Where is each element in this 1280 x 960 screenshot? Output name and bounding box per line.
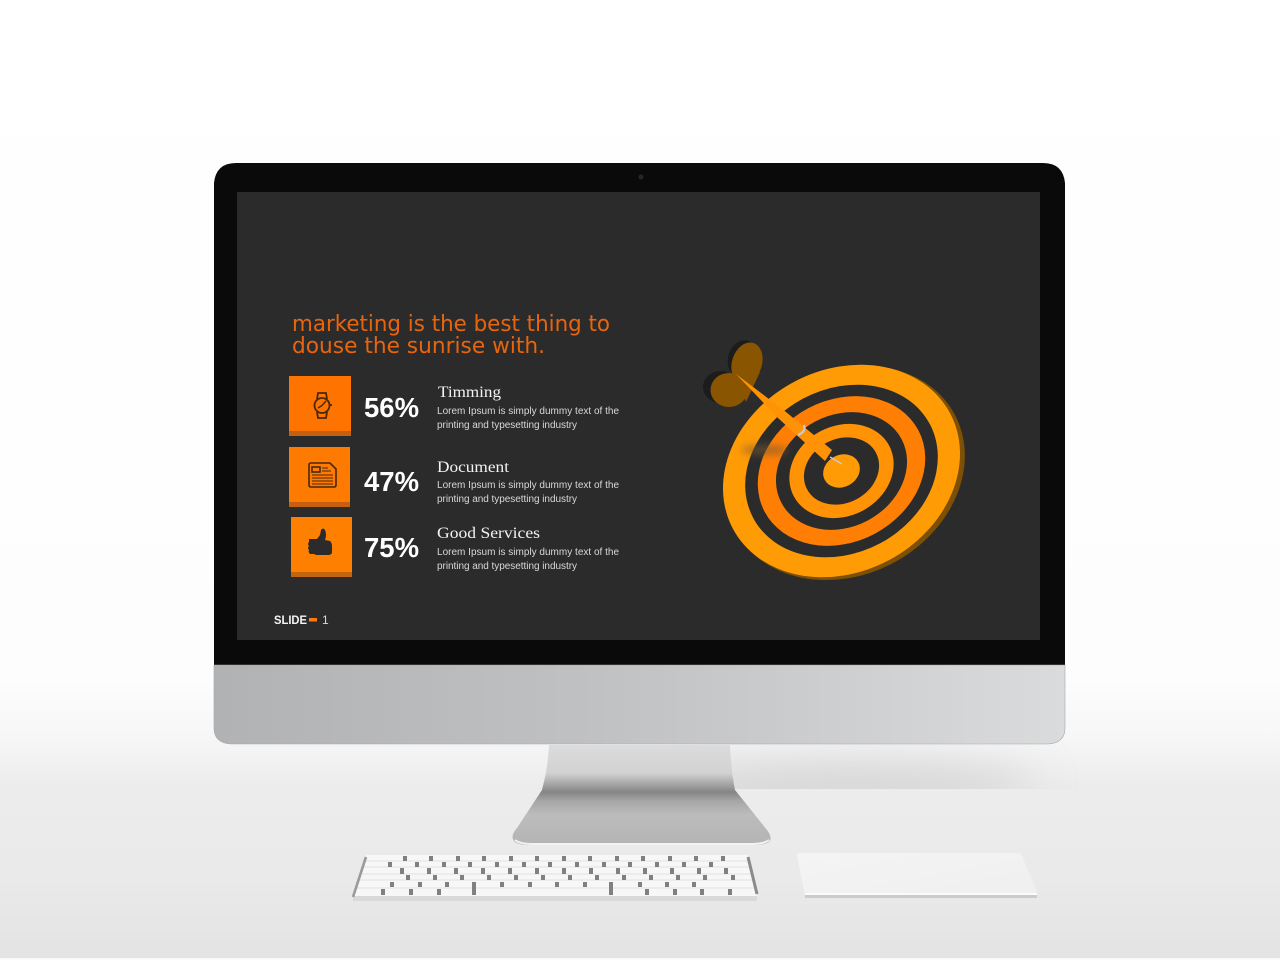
description: printing and typesetting industry xyxy=(437,494,577,505)
heading Timming: Timming xyxy=(438,384,501,401)
dart needle xyxy=(830,457,842,464)
icon tile: watch xyxy=(289,376,351,436)
row: Good Services xyxy=(291,517,619,577)
monitor xyxy=(214,163,1065,665)
monitor stand xyxy=(513,745,771,845)
dart flights xyxy=(710,338,768,407)
webcam xyxy=(638,174,644,180)
description: Lorem Ipsum is simply dummy text of the xyxy=(437,480,619,491)
description xyxy=(437,406,619,431)
heading Good Services: Good Services xyxy=(437,525,540,542)
heading Document: Document xyxy=(437,459,510,476)
keyboard xyxy=(353,855,757,901)
description xyxy=(437,547,619,572)
dart shadow on board xyxy=(741,445,789,455)
title xyxy=(292,312,610,359)
dart shaft and barrel xyxy=(736,374,832,461)
target graphic xyxy=(685,322,1003,622)
description xyxy=(437,480,619,505)
row: Document xyxy=(289,447,619,507)
description: printing and typesetting industry xyxy=(437,561,577,572)
slide number xyxy=(274,613,329,627)
monitor chin xyxy=(214,665,1065,744)
description: Lorem Ipsum is simply dummy text of the xyxy=(437,547,619,558)
slide number: SLIDE xyxy=(274,613,307,627)
slide screen xyxy=(237,192,1040,640)
row: Timming xyxy=(289,376,619,436)
description: printing and typesetting industry xyxy=(437,420,577,431)
icon tile: thumbs up xyxy=(291,517,352,577)
dart ring xyxy=(798,425,804,435)
title: marketing is the best thing to xyxy=(292,312,610,337)
trackpad xyxy=(797,853,1037,898)
slide number: 1 xyxy=(322,613,329,627)
title: douse the sunrise with. xyxy=(292,334,545,359)
percentage 75%: 75% xyxy=(364,532,419,563)
icon tile: document xyxy=(289,447,350,507)
keyboard key gaps xyxy=(381,856,735,895)
dart flight shadows xyxy=(703,337,762,403)
percentage 47%: 47% xyxy=(364,466,419,497)
dartboard xyxy=(685,322,1003,622)
dart xyxy=(703,337,842,464)
description: Lorem Ipsum is simply dummy text of the xyxy=(437,406,619,417)
percentage 56%: 56% xyxy=(364,392,419,423)
monitor bezel xyxy=(214,163,1065,665)
